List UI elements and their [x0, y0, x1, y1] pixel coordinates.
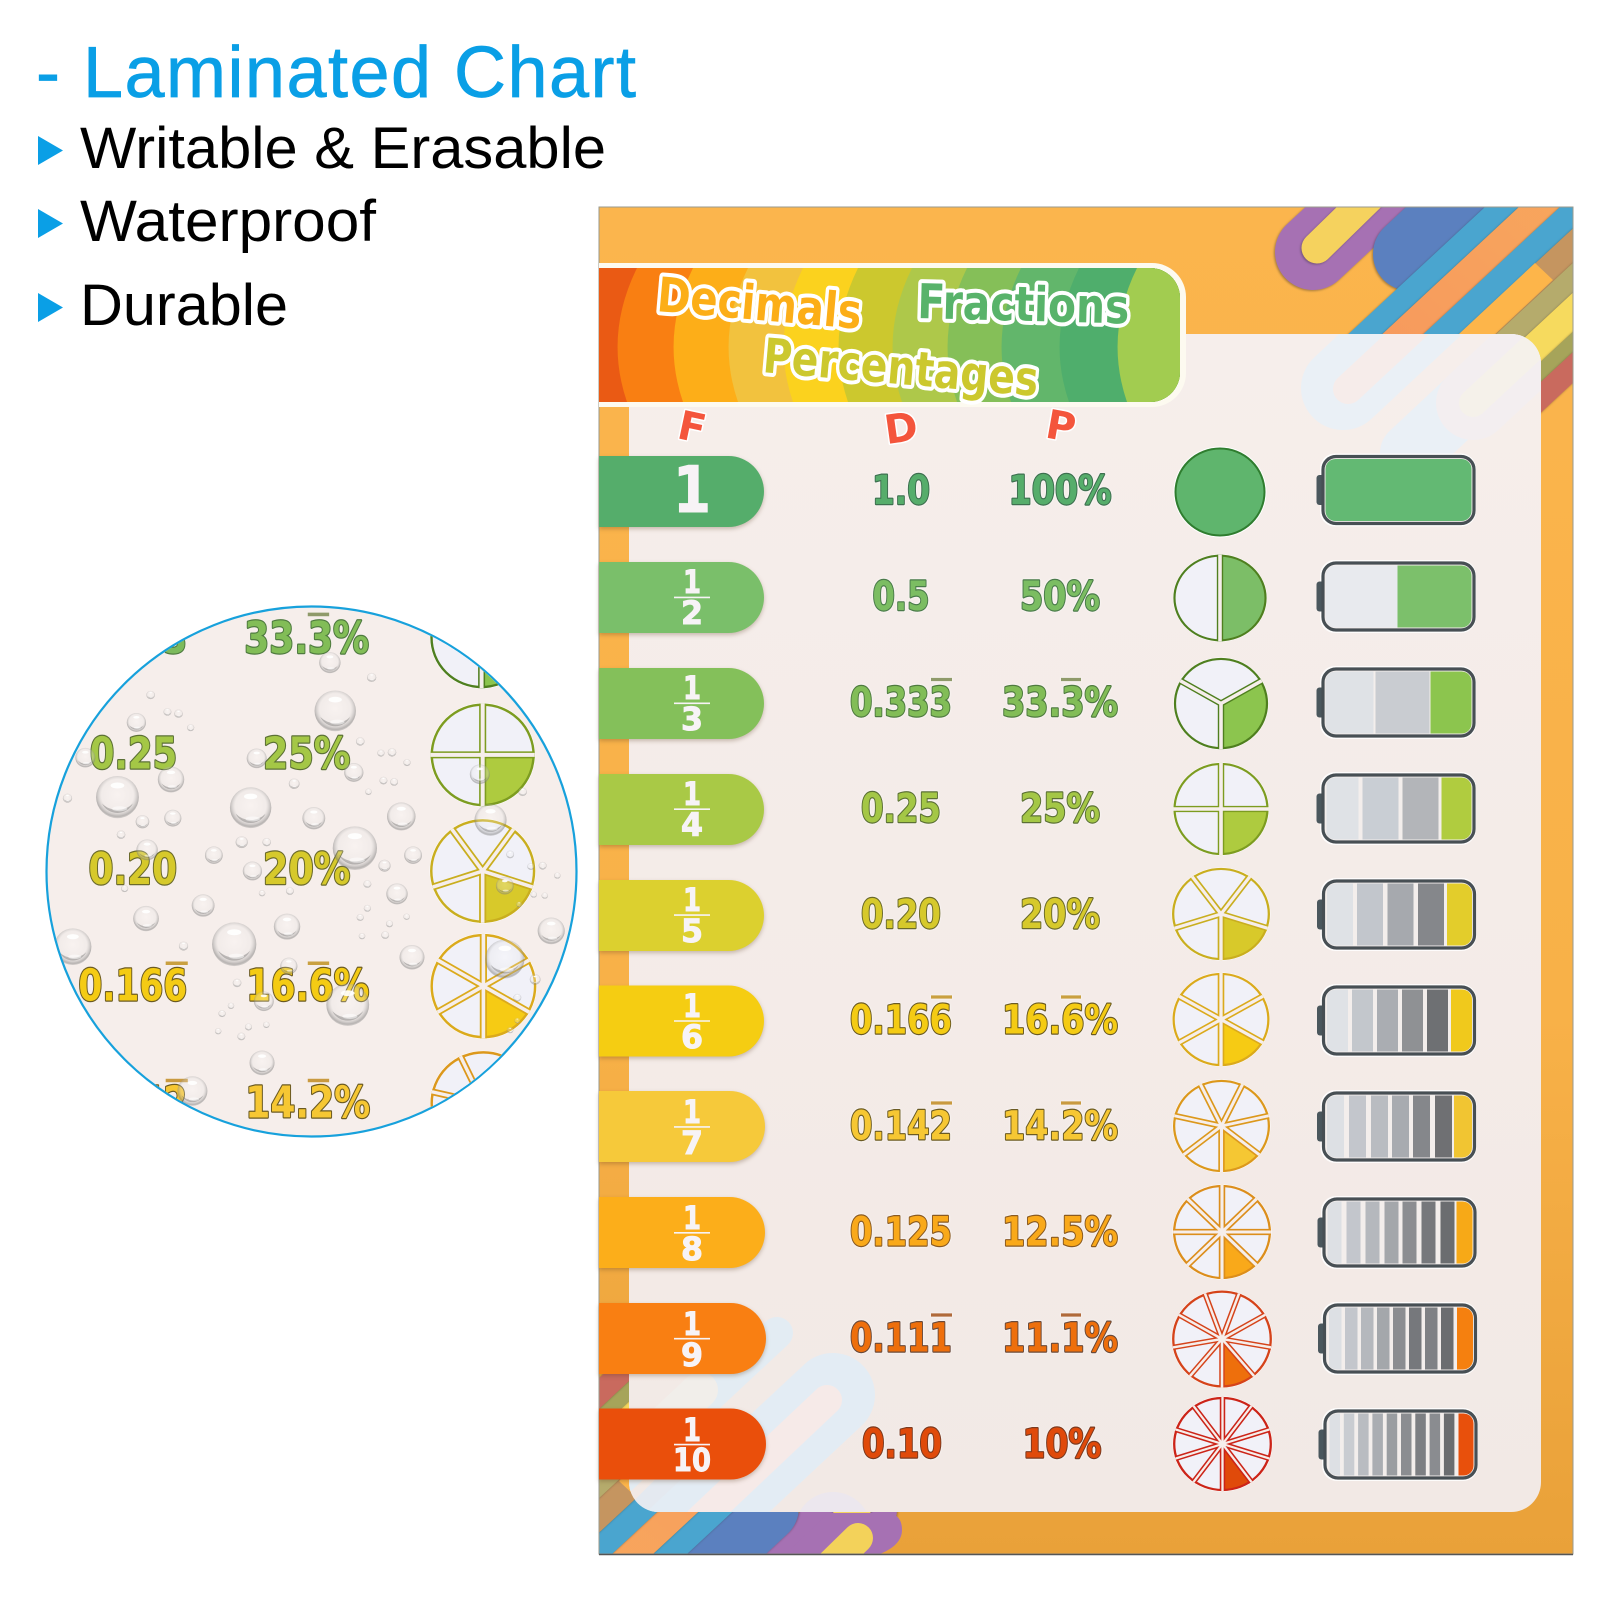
pill: 1/2: [599, 562, 764, 633]
row: one eighth: [599, 1184, 1477, 1280]
pie: one ninth: [1172, 1290, 1272, 1388]
water droplets: [54, 652, 565, 1106]
decimal 0.125: 0.125: [850, 1210, 952, 1256]
lens values: 20%: [263, 845, 350, 895]
lens values: 33.3%: [244, 614, 369, 664]
lens values: 0.142: [78, 1079, 187, 1128]
battery: one sixth: [1317, 984, 1476, 1057]
panel: white chart area: [629, 334, 1541, 1512]
pill: 1/7: 1: [683, 1093, 701, 1131]
pill: 1/6: 6: [681, 1018, 703, 1056]
pill: 1/4: 4: [681, 806, 703, 844]
heading: Percentages: Percentages: [761, 328, 1041, 408]
decimal 0.5: 0.5: [872, 574, 930, 620]
percent 10%: 10%: [1022, 1422, 1102, 1468]
battery: one tenth: [1318, 1408, 1478, 1481]
pill: 1/3: 1: [683, 669, 701, 707]
pie: one fifth: [1172, 867, 1270, 961]
percent 11.1%: 11.1%: [1002, 1316, 1118, 1362]
column letter F: F: [674, 403, 710, 453]
lens pie charts: [430, 636, 537, 1108]
pill: 1/9: 1: [683, 1305, 701, 1343]
pie: one quarter: [1173, 762, 1269, 856]
lens values: 0.25: [90, 730, 177, 779]
lens values: 16.6%: [246, 962, 369, 1011]
pie: one sixth: [1172, 972, 1270, 1067]
percent 20%: 20%: [1020, 892, 1100, 938]
column letter D: D: [881, 404, 921, 454]
battery: one quarter: [1316, 772, 1476, 845]
pill: 1/5: 5: [681, 912, 703, 950]
row: one quarter: [599, 762, 1476, 856]
pill: 1/4: 1: [683, 775, 701, 813]
battery: one third: [1316, 666, 1476, 739]
decimal 0.111: 0.111: [850, 1316, 952, 1362]
pill: 1/8: [599, 1197, 765, 1268]
bullet: waterproof: Waterproof: [80, 189, 377, 254]
pill: 1/4: [599, 774, 764, 845]
lens values: 25%: [263, 730, 350, 779]
row: one seventh: [599, 1079, 1476, 1173]
decimal 0.25: 0.25: [861, 786, 941, 832]
lens values: 14.2%: [245, 1079, 370, 1128]
pill: 1/8: 8: [681, 1230, 703, 1268]
lens values: [78, 614, 370, 1128]
percent 100%: 100%: [1008, 468, 1112, 514]
percent 14.2%: 14.2%: [1002, 1104, 1118, 1150]
pill: 1/8: 1: [683, 1199, 701, 1237]
pill: 1/7: 7: [681, 1124, 703, 1162]
decimal 0.166: 0.166: [850, 998, 952, 1044]
lens values: 0.20: [89, 845, 177, 895]
pill: 1/3: [599, 668, 764, 739]
percent 16.6%: 16.6%: [1002, 998, 1118, 1044]
pill: 1/5: 1: [683, 881, 701, 919]
percent 12.5%: 12.5%: [1002, 1210, 1118, 1256]
pill: 1/2: 1: [683, 563, 701, 601]
column letter P: P: [1042, 402, 1079, 452]
pill: 1: 1: [673, 454, 711, 528]
pill: 1/6: 1: [683, 987, 701, 1025]
battery: one fifth: [1317, 878, 1476, 951]
heading: Fractions: Fractions: [917, 274, 1130, 336]
pill: 1/10: 1: [683, 1411, 701, 1449]
battery: one eighth: [1318, 1196, 1477, 1269]
decimal 0.20: 0.20: [861, 892, 941, 938]
battery: one seventh: [1317, 1090, 1476, 1163]
battery: full: [1316, 454, 1476, 526]
pill: 1/9: [599, 1303, 766, 1374]
header banner with rainbow arcs: [599, 263, 1200, 408]
bullet: durable: Durable: [80, 273, 288, 338]
percent 25%: 25%: [1020, 786, 1100, 832]
row: one ninth: [599, 1290, 1478, 1388]
pie: one seventh: [1173, 1079, 1270, 1173]
row: one sixth: [599, 972, 1476, 1067]
title: - Laminated Chart: [36, 33, 636, 113]
battery: one ninth: [1318, 1302, 1478, 1375]
decimal 1.0: 1.0: [872, 468, 930, 514]
row: one whole: [599, 446, 1476, 538]
heading: Decimals: Decimals: [655, 267, 864, 341]
percent 33.3%: 33.3%: [1002, 680, 1118, 726]
lens values: 0.166: [78, 962, 187, 1011]
pie: one half: [1173, 554, 1267, 642]
pie: one tenth: [1173, 1396, 1272, 1492]
pie: one eighth: [1173, 1184, 1271, 1280]
pill: 1/6: [599, 986, 764, 1056]
pill: 1/2: 2: [681, 594, 703, 632]
percent 50%: 50%: [1020, 574, 1100, 620]
decimal 0.333: 0.333: [850, 680, 952, 726]
pill: 1/5: [599, 880, 764, 951]
decimal 0.10: 0.10: [862, 1422, 942, 1468]
pie: one third: [1174, 657, 1268, 750]
pill: 1: [599, 454, 764, 528]
pill: 1/10: 10: [673, 1441, 711, 1479]
pill: 1/3: 3: [681, 700, 703, 738]
row: one fifth: [599, 867, 1476, 961]
pill: 1/10: [599, 1408, 766, 1480]
row: one half: [599, 554, 1476, 642]
lens values: 0.333: [78, 614, 187, 664]
pill: 1/7: [599, 1091, 765, 1162]
battery: one half: [1316, 560, 1476, 633]
bullet: writable and erasable: Writable & Erasable: [80, 116, 606, 181]
decimal 0.142: 0.142: [850, 1104, 952, 1150]
pill: 1/9: 9: [681, 1336, 703, 1374]
magnified lens: water droplets on chart: [46, 587, 576, 1156]
pie: full: [1174, 446, 1266, 538]
row: one third: [599, 657, 1476, 750]
row: one tenth: [599, 1396, 1478, 1492]
poster board: [598, 206, 1574, 1556]
